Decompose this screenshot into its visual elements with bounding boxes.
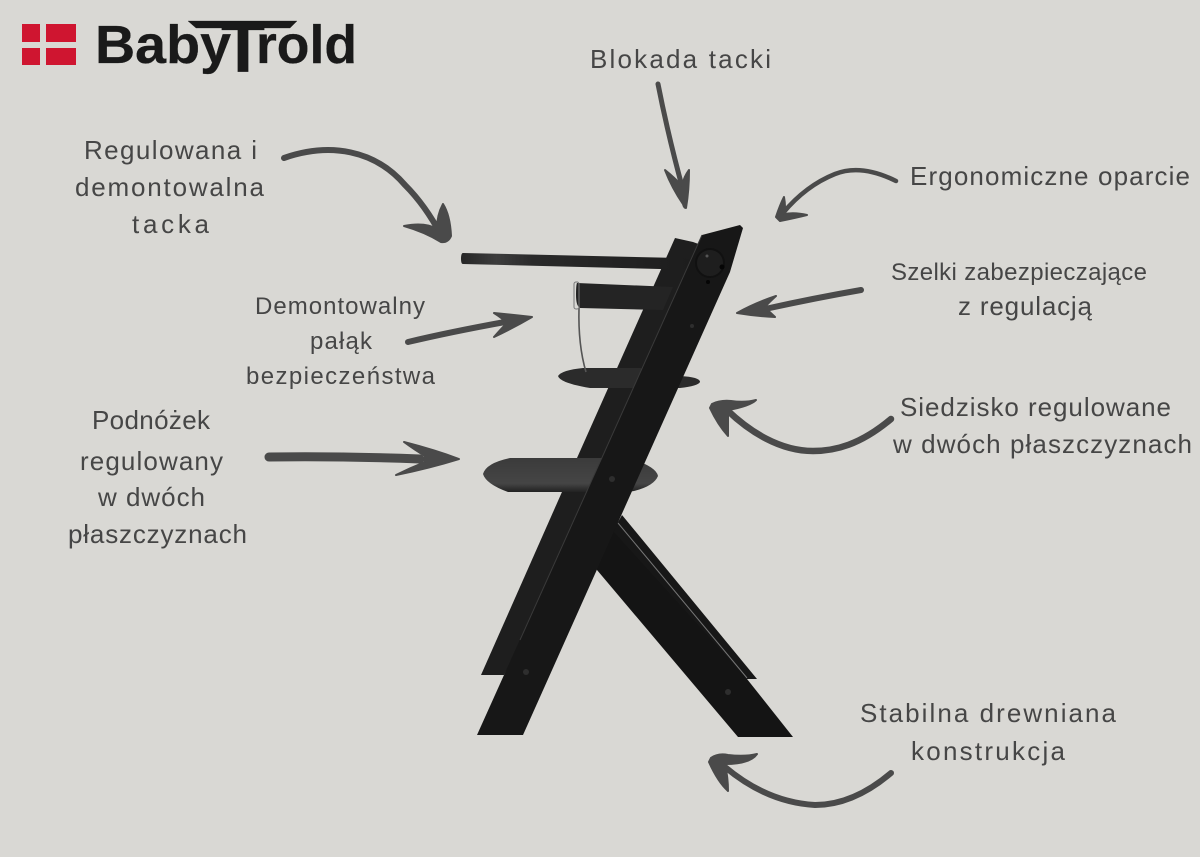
arrow — [408, 313, 532, 342]
arrow — [776, 170, 896, 221]
label — [860, 698, 1117, 766]
label: w dwóch — [97, 482, 205, 512]
logo wordmark: Baby — [95, 15, 231, 75]
callout: Podnóżek regulowany w dwóch płaszczyznach — [68, 405, 459, 549]
icon: Danish flag — [22, 24, 76, 65]
logo wordmark: T — [221, 8, 265, 88]
label: bezpieczeństwa — [246, 363, 436, 390]
callout: Regulowana i demontowalna tacka — [75, 135, 451, 242]
chair: bolts — [523, 324, 731, 695]
label: regulowany — [80, 446, 223, 476]
logo: BabyTrold — [22, 8, 357, 88]
label: pałąk — [310, 328, 373, 355]
label: płaszczyznach — [68, 519, 247, 549]
logo wordmark: rold — [256, 15, 357, 75]
arrow — [710, 400, 891, 451]
label: demontowalna — [75, 172, 265, 202]
label: Regulowana i — [84, 135, 257, 165]
label: Stabilna drewniana — [860, 698, 1117, 728]
callout: Stabilna drewniana konstrukcja — [709, 698, 1117, 805]
label: tacka — [132, 209, 210, 239]
label: Demontowalny — [255, 293, 425, 320]
chair: main front beam — [477, 225, 743, 735]
chair: rear upright and leg — [481, 238, 715, 675]
label: w dwóch płaszczyznach — [892, 429, 1192, 459]
label — [246, 293, 436, 390]
arrow — [709, 754, 891, 805]
callout: Szelki zabezpieczające z regulacją — [737, 259, 1147, 321]
chair: large footrest — [483, 458, 658, 492]
arrow — [269, 442, 459, 475]
chair: rear diagonal leg — [597, 515, 757, 679]
chair: tray — [461, 253, 700, 270]
label — [68, 405, 247, 549]
chair: front diagonal leg — [585, 530, 793, 737]
callout: Blokada tacki — [590, 44, 771, 208]
label: Siedzisko regulowane — [900, 392, 1171, 422]
label: z regulacją — [958, 291, 1093, 321]
chair illustration — [461, 225, 793, 737]
label: Podnóżek — [92, 405, 211, 435]
label — [892, 392, 1192, 459]
label: Blokada tacki — [590, 44, 771, 74]
logo wordmark — [95, 8, 357, 88]
chair: adjustment knob — [696, 249, 724, 284]
label: Szelki zabezpieczające — [891, 259, 1147, 286]
callout: Siedzisko regulowane w dwóch płaszczyznach — [710, 392, 1192, 459]
label: Ergonomiczne oparcie — [910, 161, 1190, 191]
label — [891, 259, 1147, 321]
chair: safety bar — [576, 283, 673, 310]
callout: Ergonomiczne oparcie — [776, 161, 1190, 221]
callout: Demontowalny pałąk bezpieczeństwa — [246, 293, 532, 390]
arrow — [737, 290, 861, 317]
chair: small seat — [558, 368, 700, 388]
label: konstrukcja — [911, 736, 1066, 766]
arrow — [658, 84, 689, 208]
arrow — [284, 150, 451, 242]
chair: safety strap — [579, 308, 586, 372]
label — [75, 135, 265, 239]
